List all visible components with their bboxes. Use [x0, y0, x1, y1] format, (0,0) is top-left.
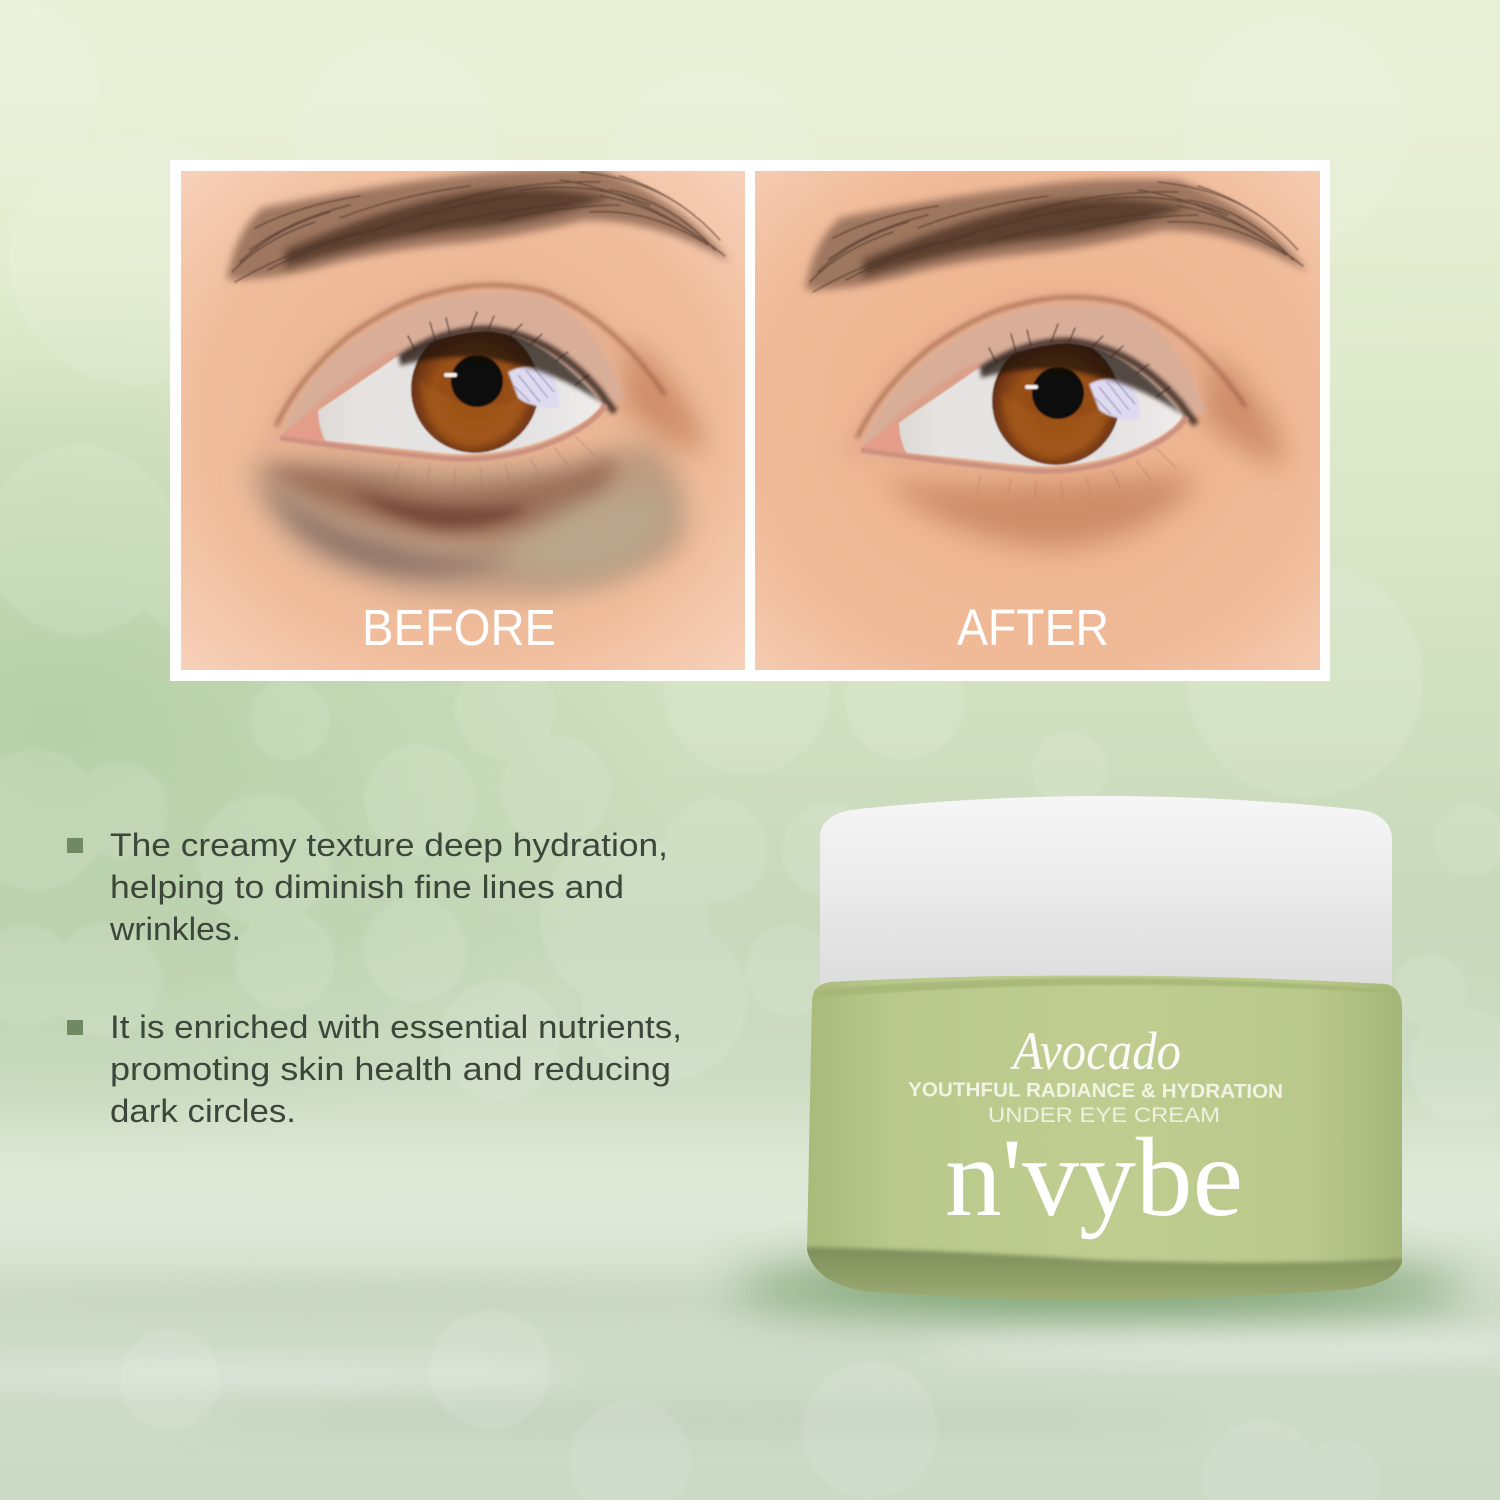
panel: before photo	[181, 169, 745, 670]
jar base	[807, 1246, 1402, 1300]
under-eye faint circle	[880, 475, 1200, 548]
panel: after photo	[755, 171, 1320, 670]
eye	[255, 278, 705, 486]
label: BEFORE: BEFORE	[362, 599, 556, 656]
panel: before and after photo frame	[170, 160, 1330, 681]
eye	[836, 290, 1286, 498]
eyebrow	[227, 169, 730, 282]
jar body	[800, 975, 1410, 1310]
jar label	[908, 1021, 1283, 1240]
jar lid	[820, 796, 1392, 990]
tagline: YOUTHFUL RADIANCE & HYDRATION	[908, 1079, 1283, 1103]
bullet 2: promoting skin health and reducing	[110, 1051, 671, 1087]
jar shadow	[730, 1266, 1470, 1310]
bullet 1	[67, 827, 668, 947]
bullet 1: The creamy texture deep hydration,	[110, 827, 668, 863]
bullet 2: dark circles.	[110, 1093, 296, 1129]
brand name: n'vybe	[945, 1116, 1243, 1240]
under-eye dark circle	[250, 440, 684, 595]
label: AFTER: AFTER	[957, 599, 1109, 656]
bullet 1: wrinkles.	[109, 911, 241, 947]
product type: UNDER EYE CREAM	[988, 1104, 1220, 1127]
bullet 2	[67, 1009, 682, 1129]
eyebrow	[805, 179, 1308, 292]
Avocado script: Avocado	[1010, 1021, 1181, 1081]
bullet 2: It is enriched with essential nutrients,	[110, 1009, 682, 1045]
benefit list	[67, 827, 682, 1129]
product jar	[730, 796, 1470, 1310]
bullet 1: helping to diminish fine lines and	[110, 869, 624, 905]
